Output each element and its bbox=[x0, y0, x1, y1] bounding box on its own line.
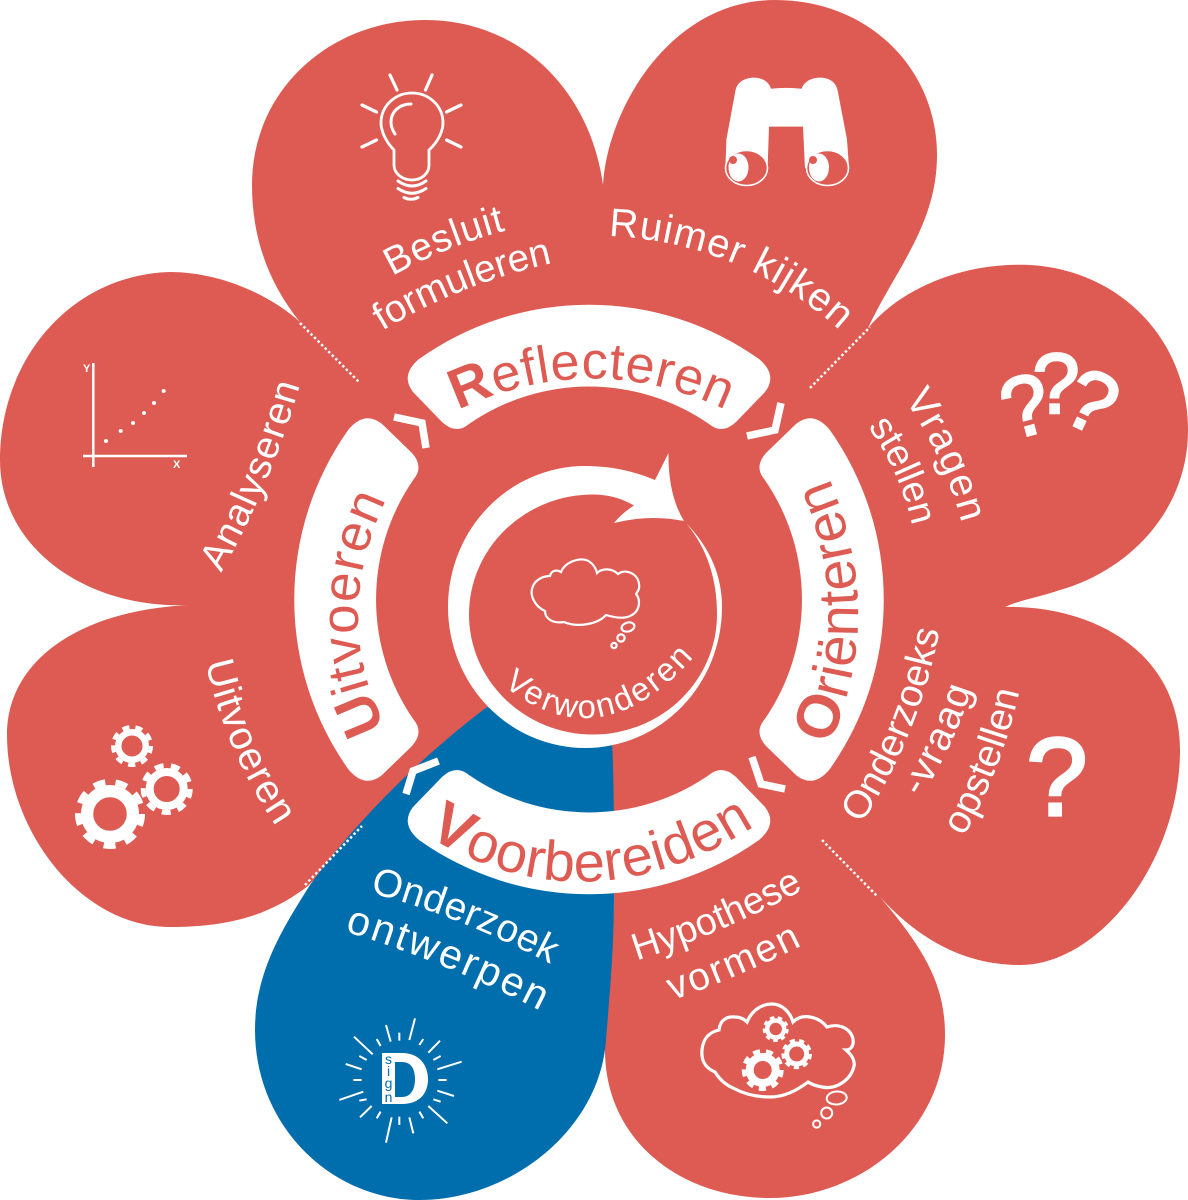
dotted petal separators bbox=[300, 323, 878, 897]
label: Hypothese vormen: Hypothese bbox=[631, 875, 800, 960]
label: Onderzoeksvraag opstellen: -vraag bbox=[910, 684, 977, 792]
icon: D-sign logo: g bbox=[385, 1075, 392, 1091]
icon: scatter chart: Y bbox=[83, 363, 91, 375]
banner: Voorbereiden: Voorbereiden bbox=[440, 800, 752, 882]
label: Uitvoeren: Uitvoeren bbox=[208, 659, 290, 824]
center disc bbox=[467, 492, 719, 736]
icon: gears bbox=[78, 727, 190, 846]
icon: three question marks bbox=[990, 337, 1133, 458]
icon: D-sign logo: s bbox=[385, 1051, 392, 1067]
icon: thought cloud center bbox=[532, 560, 639, 648]
icon: three question marks: ? bbox=[1050, 349, 1133, 455]
label: Onderzoeksvraag opstellen: opstellen bbox=[949, 690, 1019, 832]
icon: binoculars bbox=[725, 78, 849, 186]
label: Hypothese vormen: vormen bbox=[666, 930, 800, 998]
icon: D-sign logo: i bbox=[387, 1063, 390, 1079]
label: Onderzoeksvraag opstellen: Onderzoeks bbox=[844, 628, 938, 818]
icon: light bulb bbox=[362, 75, 461, 199]
icon: D-sign logo: n bbox=[385, 1089, 392, 1105]
label: Besluit formuleren: Besluit bbox=[382, 207, 506, 274]
label: Analyseren: Analyseren bbox=[203, 383, 300, 573]
center circular arrow bbox=[448, 453, 722, 748]
icon: cloud with gears bbox=[702, 1004, 854, 1128]
label: Onderzoeksvraag opstellen bbox=[844, 628, 1019, 832]
label: Vragen stellen: stellen bbox=[870, 418, 930, 524]
icon: three question marks: ? bbox=[1032, 337, 1080, 432]
arrows: chevrons between banners bbox=[394, 403, 785, 794]
label: Vragen stellen bbox=[870, 384, 980, 524]
banner: Uitvoeren: Uitvoeren bbox=[329, 494, 385, 740]
banner: Oriënteren bbox=[759, 418, 884, 781]
banner: Oriënteren: Oriënteren bbox=[796, 481, 858, 738]
label: Verwonderen: Verwonderen bbox=[510, 648, 692, 718]
banner: Reflecteren: Reflecteren bbox=[446, 344, 731, 408]
label: Onderzoek ontwerpen: Onderzoek bbox=[374, 870, 560, 964]
icon: three question marks: ? bbox=[990, 354, 1061, 458]
flower petal: blue, Onderzoek ontwerpen bbox=[255, 707, 614, 1200]
icon: scatter chart: X bbox=[173, 459, 181, 471]
icon: question mark: ? bbox=[1026, 716, 1088, 839]
label: Hypothese vormen bbox=[631, 875, 800, 998]
label: Ruimer kijken: Ruimer kijken bbox=[612, 208, 850, 328]
icon: scatter chart bbox=[83, 363, 187, 471]
banner: Reflecteren bbox=[408, 304, 770, 429]
label: Onderzoek ontwerpen: ontwerpen bbox=[348, 913, 546, 1010]
banner: Uitvoeren bbox=[294, 418, 418, 781]
icon: D-sign logo bbox=[339, 1018, 462, 1143]
label: Vragen stellen: Vragen bbox=[910, 384, 980, 520]
label: Besluit formuleren: formuleren bbox=[372, 244, 550, 330]
